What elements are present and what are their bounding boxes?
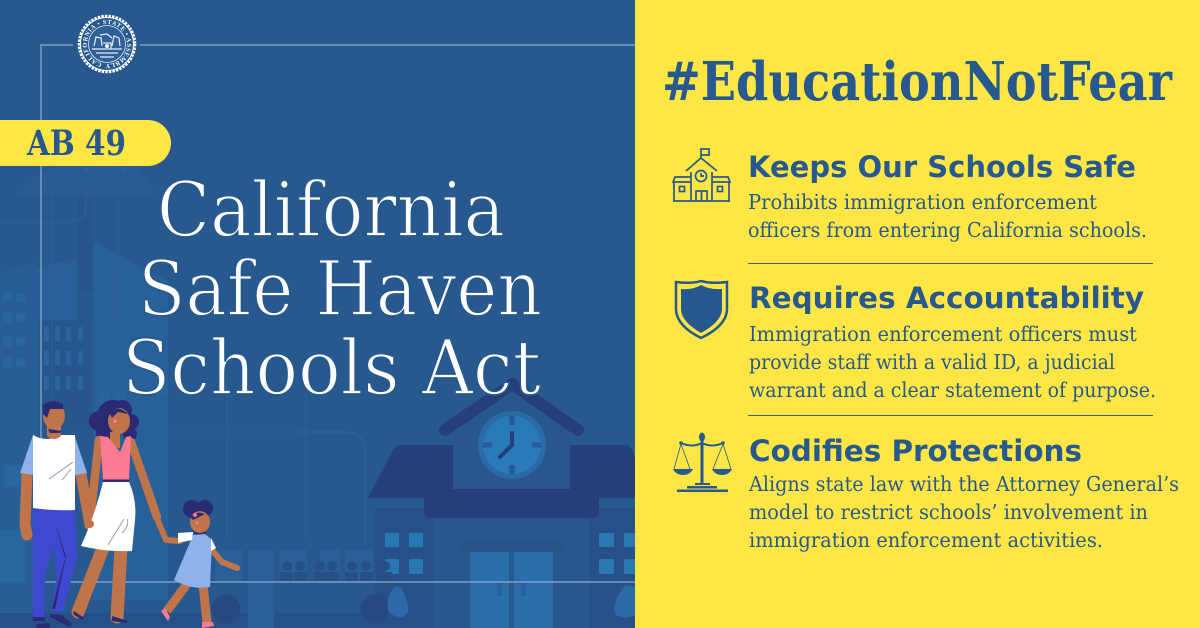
description: provide staff with a valid ID, a judicial <box>749 350 1115 374</box>
background school building <box>0 384 635 628</box>
background city illustration <box>0 159 365 628</box>
icon: scales of justice <box>673 432 732 492</box>
description: warrant and a clear statement of purpose. <box>749 378 1156 402</box>
panel: yellow right side <box>635 0 1200 628</box>
description <box>749 322 1156 402</box>
heading: Codifies Protections <box>749 434 1082 468</box>
panel: blue illustrated left side <box>0 14 635 628</box>
icon: shield <box>676 281 727 338</box>
item: Keeps Our Schools Safe <box>673 149 1147 242</box>
description: officers from entering California schools. <box>748 218 1147 242</box>
item: Requires Accountability <box>676 281 1156 402</box>
trees and balls <box>212 586 635 624</box>
seal: California State Assembly <box>78 14 136 74</box>
description: Prohibits immigration enforcement <box>748 190 1098 214</box>
item: Codifies Protections <box>673 432 1179 552</box>
description: immigration enforcement activities. <box>749 528 1103 552</box>
father <box>20 401 90 628</box>
heading: Keeps Our Schools Safe <box>748 150 1136 184</box>
frame line <box>41 45 635 582</box>
mother <box>73 400 157 623</box>
divider <box>748 415 1153 416</box>
badge: AB 49 <box>0 120 171 166</box>
icon: schoolhouse <box>673 149 730 201</box>
clock <box>478 411 546 479</box>
title <box>122 165 542 412</box>
heading: Requires Accountability <box>749 281 1144 315</box>
child <box>158 500 237 628</box>
title: Schools Act <box>122 323 541 412</box>
audience in school windows <box>215 550 392 628</box>
divider <box>748 263 1153 264</box>
description: Immigration enforcement officers must <box>749 322 1138 346</box>
title: Safe Haven <box>138 244 542 333</box>
description: Aligns state law with the Attorney General’s <box>748 472 1179 496</box>
title: California <box>157 165 505 254</box>
family illustration <box>20 400 237 628</box>
description <box>748 190 1147 242</box>
description <box>748 472 1179 552</box>
description: model to restrict schools’ involvement in <box>749 500 1148 524</box>
badge: AB 49: AB 49 <box>26 123 126 164</box>
